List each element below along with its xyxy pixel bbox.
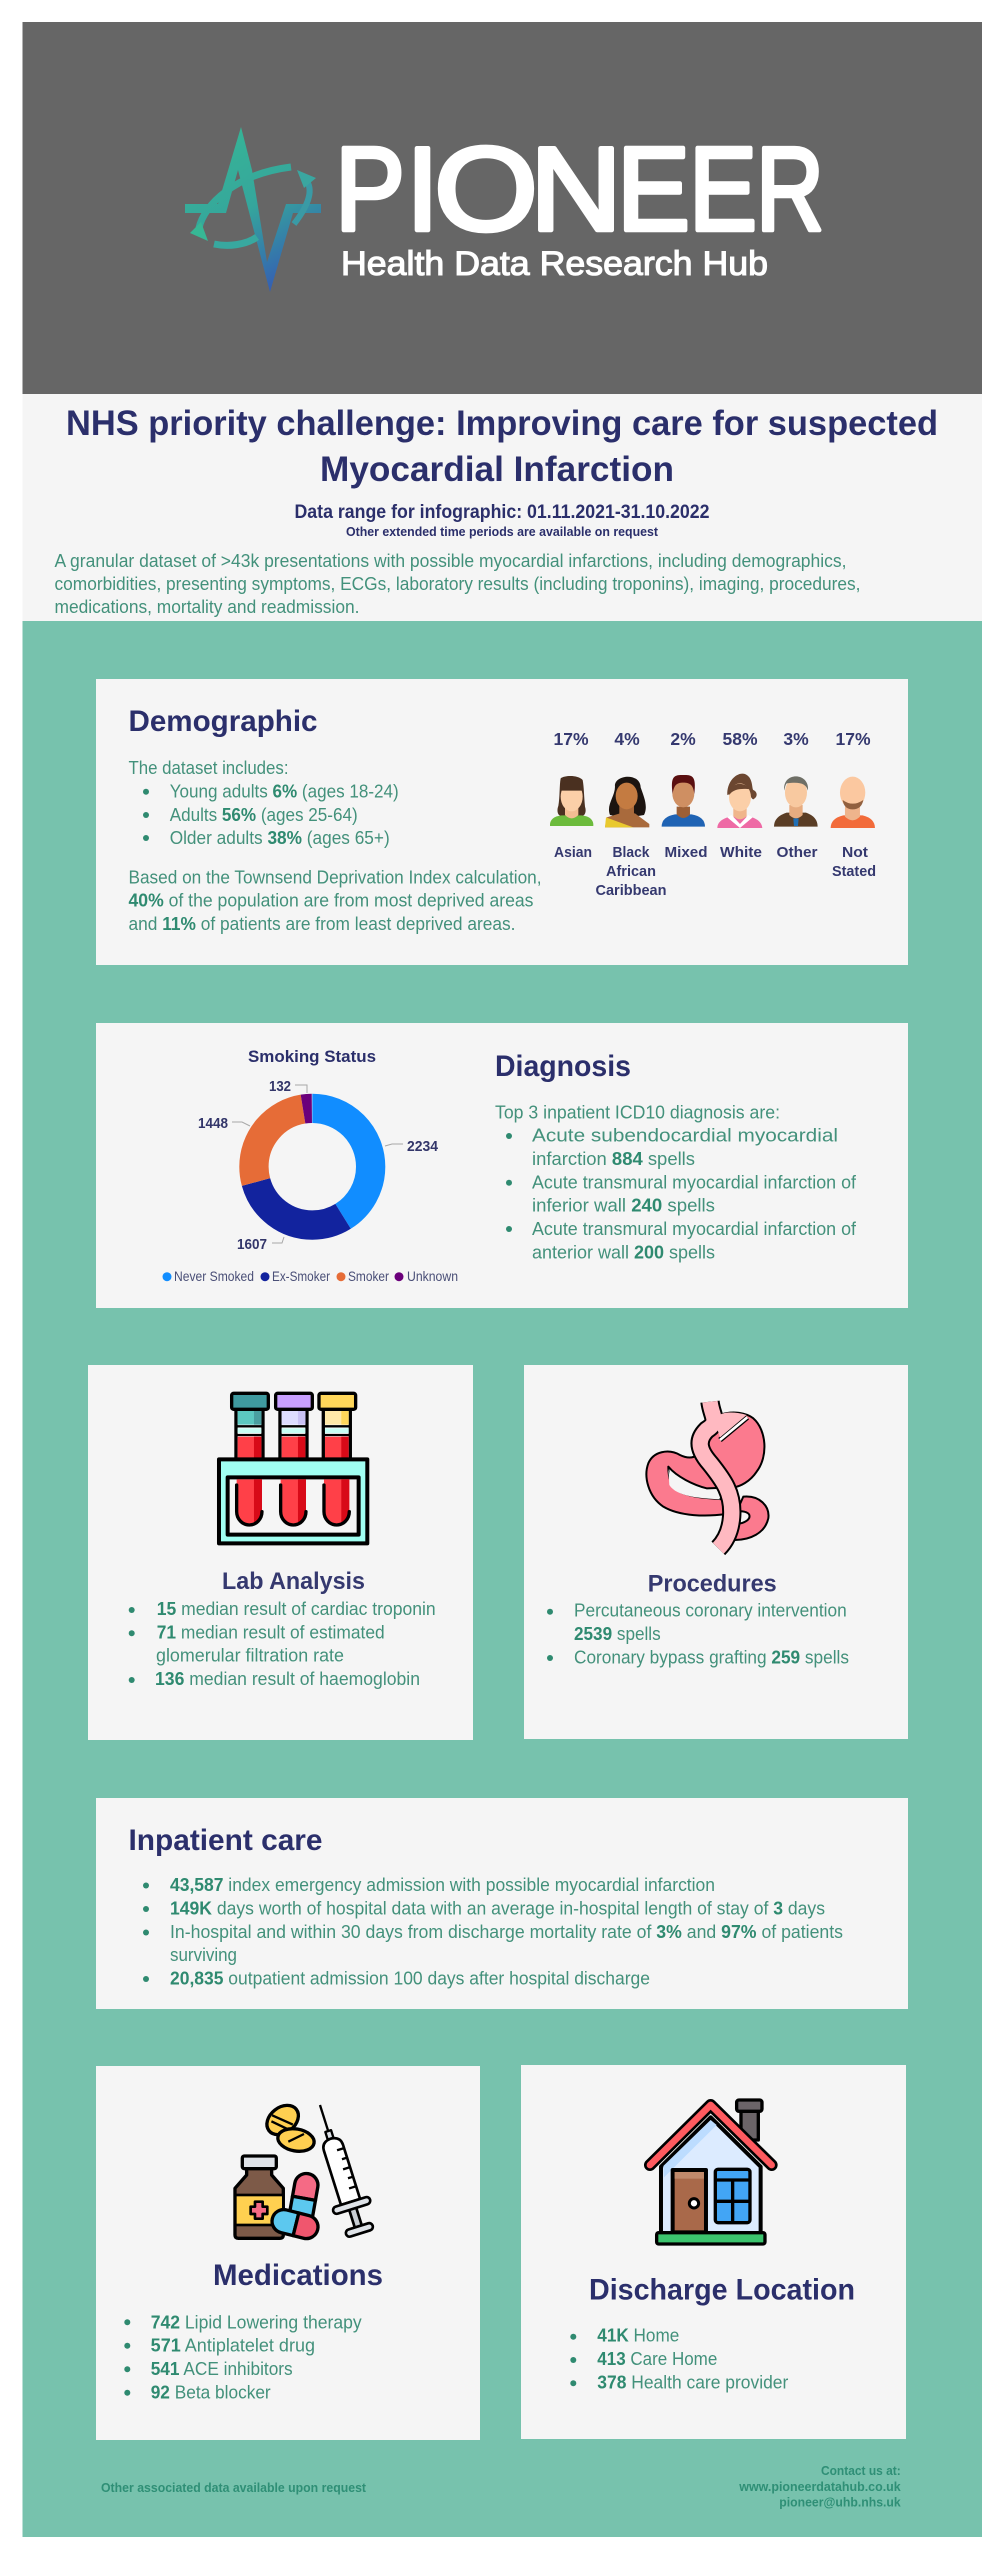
ethnicity labels — [554, 844, 876, 899]
intro text: medications, mortality and readmission. — [54, 597, 360, 617]
heading: medications: Medications — [213, 2259, 383, 2292]
lab results list — [129, 1599, 436, 1689]
discharge list: 378 Health care provider — [597, 2372, 788, 2392]
deprivation text: 40% of the population are from most deprived areas — [128, 891, 534, 911]
donut leader lines — [232, 1085, 403, 1243]
icon: bottle — [235, 2156, 283, 2238]
logo subtitle: Health Data Research Hub — [341, 245, 768, 283]
procedures list: Coronary bypass grafting 259 spells — [574, 1647, 849, 1667]
icon: Black African Caribbean person — [605, 777, 649, 827]
lab results list: 136 median result of haemoglobin — [155, 1669, 420, 1689]
chart legend: Unknown — [407, 1269, 458, 1284]
diagnosis text: Top 3 inpatient ICD10 diagnosis are: — [495, 1102, 780, 1122]
logo wordmark: P — [335, 123, 405, 256]
ethnicity labels: Mixed — [664, 844, 708, 861]
heading: diagnosis: Diagnosis — [495, 1050, 631, 1083]
age breakdown: The dataset includes: — [128, 758, 288, 778]
diagnosis text: Acute transmural myocardial infarction of — [532, 1219, 857, 1239]
deprivation text: Based on the Townsend Deprivation Index calculation, — [128, 867, 542, 887]
discharge list: 413 Care Home — [597, 2349, 717, 2369]
donut value labels: 2234 — [407, 1138, 439, 1155]
chart legend: Never Smoked — [174, 1269, 254, 1284]
intro text — [54, 551, 860, 617]
diagnosis text: inferior wall 240 spells — [532, 1196, 715, 1216]
logo wordmark: I — [406, 123, 439, 256]
logo wordmark — [335, 123, 824, 256]
icons: ethnicity people — [550, 774, 875, 828]
age breakdown: Adults 56% (ages 25-64) — [170, 805, 358, 825]
medications list: 571 Antiplatelet drug — [151, 2336, 315, 2356]
heading: inpatient care: Inpatient care — [128, 1824, 322, 1857]
title — [66, 404, 938, 489]
lab results list: 71 median result of estimated — [157, 1622, 385, 1642]
chart legend — [162, 1269, 458, 1284]
ethnicity labels: African — [606, 863, 656, 880]
heading: demographic: Demographic — [128, 705, 318, 738]
ethnicity percentages: 17% — [553, 729, 589, 749]
panel: demographic — [96, 679, 908, 965]
chart title: Smoking Status — [248, 1047, 376, 1066]
footer note: Other associated data available upon request — [101, 2480, 367, 2495]
heading: lab analysis: Lab Analysis — [222, 1568, 365, 1595]
donut value labels: 1607 — [237, 1236, 267, 1253]
icon: Not stated person — [831, 777, 875, 828]
heading: discharge location: Discharge Location — [589, 2273, 855, 2306]
icon: Mixed person — [662, 775, 705, 827]
panel: smoking and diagnosis — [96, 1023, 908, 1308]
medications list: 742 Lipid Lowering therapy — [151, 2312, 362, 2332]
donut value labels: 132 — [269, 1078, 291, 1095]
donut value labels: 1448 — [198, 1115, 228, 1132]
ethnicity percentages: 2% — [670, 729, 696, 749]
discharge list — [570, 2326, 788, 2392]
diagnosis text — [495, 1102, 857, 1262]
icon: capsules — [270, 2172, 320, 2241]
ethnicity labels: Black — [612, 844, 650, 861]
icon: syringe — [302, 2099, 379, 2239]
diagnosis text: Acute transmural myocardial infarction of — [532, 1172, 857, 1192]
icon: house — [650, 2100, 772, 2244]
age breakdown: Young adults 6% (ages 18-24) — [170, 781, 399, 801]
title: NHS priority challenge: Improving care for suspected — [66, 404, 938, 443]
intro panel — [22, 394, 982, 621]
ethnicity percentages: 58% — [722, 729, 758, 749]
ethnicity labels: Not — [842, 844, 868, 861]
ethnicity labels: Stated — [832, 863, 876, 880]
chart legend: Ex-Smoker — [272, 1269, 330, 1284]
age breakdown: Older adults 38% (ages 65+) — [170, 828, 390, 848]
diagnosis text: infarction 884 spells — [532, 1149, 695, 1169]
ethnicity percentages — [553, 729, 871, 749]
inpatient list: 20,835 outpatient admission 100 days after hospital discharge — [170, 1969, 650, 1989]
ethnicity percentages: 3% — [783, 729, 809, 749]
logo wordmark: N — [530, 123, 622, 256]
icon: PIONEER logo mark — [185, 127, 321, 292]
logo wordmark: E — [617, 123, 690, 256]
panel: procedures — [524, 1365, 908, 1739]
logo wordmark: E — [689, 123, 757, 256]
contact details: Contact us at: — [821, 2463, 901, 2478]
ethnicity percentages: 17% — [835, 729, 871, 749]
icon: bypass graft — [646, 1402, 768, 1548]
ethnicity labels: Other — [776, 844, 818, 861]
contact details: www.pioneerdatahub.co.uk — [738, 2479, 901, 2494]
ethnicity labels: Asian — [554, 844, 592, 861]
title: Myocardial Infarction — [320, 450, 674, 489]
procedures list — [547, 1601, 849, 1667]
icon: tablets — [261, 2099, 316, 2154]
header banner — [22, 22, 982, 394]
medications list: 541 ACE inhibitors — [151, 2359, 293, 2379]
icon: White person — [717, 774, 762, 828]
donut chart: smoking status — [254, 1108, 371, 1225]
icon: Asian person — [550, 776, 593, 826]
discharge list: 41K Home — [597, 2326, 679, 2346]
diagnosis text: Acute subendocardial myocardial — [532, 1126, 838, 1146]
medications list: 92 Beta blocker — [151, 2382, 271, 2402]
ethnicity labels: Caribbean — [596, 882, 666, 899]
contact details — [738, 2463, 901, 2510]
intro text: A granular dataset of >43k presentations with possible myocardial infarctions, including demographics, — [54, 551, 846, 571]
logo wordmark: R — [756, 123, 824, 256]
deprivation text: and 11% of patients are from least deprived areas. — [128, 914, 516, 934]
icon: Other person — [774, 776, 818, 827]
medications list — [124, 2312, 362, 2402]
logo wordmark: O — [434, 123, 538, 256]
lab results list: glomerular filtration rate — [156, 1646, 344, 1666]
panel: lab analysis — [88, 1365, 473, 1740]
date range note: Other extended time periods are available on request — [346, 524, 659, 539]
procedures list: Percutaneous coronary intervention — [574, 1601, 847, 1621]
panel: medications — [96, 2066, 480, 2440]
teal background — [22, 621, 982, 2537]
panel: inpatient care — [96, 1798, 908, 2009]
ethnicity labels: White — [720, 844, 762, 861]
date range: Data range for infographic: 01.11.2021-31.10.2022 — [294, 502, 710, 523]
icon: test tubes in rack — [219, 1393, 367, 1543]
inpatient list: 149K days worth of hospital data with an average in-hospital length of stay of 3 days — [170, 1898, 825, 1918]
inpatient list: 43,587 index emergency admission with possible myocardial infarction — [170, 1875, 715, 1895]
diagnosis text: anterior wall 200 spells — [532, 1242, 715, 1262]
inpatient list: surviving — [170, 1945, 237, 1965]
icon: medications — [235, 2099, 379, 2241]
panel: discharge location — [521, 2065, 906, 2439]
heading: procedures: Procedures — [648, 1571, 777, 1598]
procedures list: 2539 spells — [574, 1624, 661, 1644]
donut value labels — [198, 1078, 439, 1253]
contact details: pioneer@uhb.nhs.uk — [779, 2495, 901, 2510]
chart legend: Smoker — [348, 1269, 389, 1284]
intro text: comorbidities, presenting symptoms, ECGs, laboratory results (including troponins), imaging, procedures, — [54, 574, 860, 594]
age breakdown — [128, 758, 399, 848]
lab results list: 15 median result of cardiac troponin — [157, 1599, 436, 1619]
inpatient list — [143, 1875, 843, 1989]
inpatient list: In-hospital and within 30 days from discharge mortality rate of 3% and 97% of patients — [170, 1922, 843, 1942]
deprivation text — [128, 867, 542, 934]
ethnicity percentages: 4% — [614, 729, 640, 749]
